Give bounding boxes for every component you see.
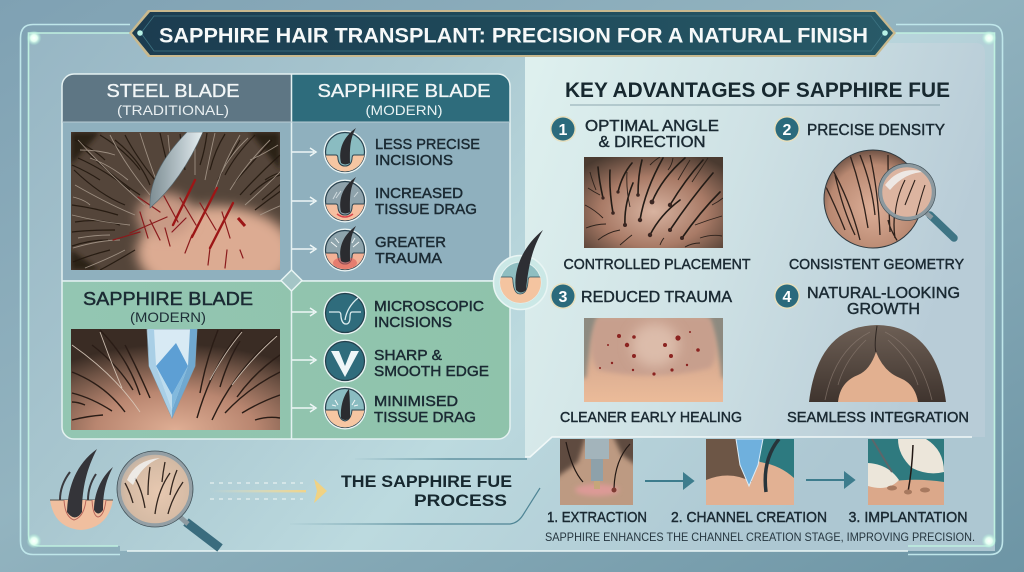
icon: sharp edge: [324, 340, 366, 382]
illustration: woman hair: [809, 325, 946, 402]
advantage 2: [774, 116, 964, 273]
sapphire header: (MODERN): [366, 102, 442, 118]
heading: & DIRECTION: [598, 134, 706, 151]
icon: magnifying glass: [117, 451, 220, 548]
arrow: [645, 474, 693, 488]
sapphire blade: [147, 329, 197, 418]
arrows and items: sapphire: [292, 292, 489, 430]
advantage 1: [550, 116, 750, 273]
badge 1: 1: [559, 122, 568, 139]
badge 4: 4: [783, 289, 792, 306]
icon: magnified density: [824, 150, 954, 248]
badge 3: 3: [559, 289, 568, 306]
heading: OPTIMAL ANGLE: [585, 118, 719, 135]
arrow: gold dotted: [210, 479, 327, 503]
heading: key advantages: KEY ADVANTAGES OF SAPPHIRE FUE: [565, 79, 950, 102]
arrow: [292, 308, 316, 316]
sapphire body: [62, 281, 510, 439]
arrow: [292, 404, 316, 412]
icon: microscopic incisions: [324, 292, 366, 334]
heading: process: [341, 472, 512, 510]
step 2: channel creation: 2. CHANNEL CREATION: [671, 509, 827, 526]
step 1: extraction: [548, 439, 646, 522]
title banner: [129, 10, 896, 57]
heading: REDUCED TRAUMA: [581, 289, 732, 306]
heading: PRECISE DENSITY: [807, 122, 945, 139]
sapphire header: SAPPHIRE BLADE: [318, 81, 490, 101]
diamond connector: [281, 270, 302, 291]
heading: process: PROCESS: [414, 491, 507, 510]
heading: [585, 118, 719, 151]
heading: process: THE SAPPHIRE FUE: [341, 472, 512, 491]
icon: follicle, tissue drag: [324, 177, 366, 222]
sapphire list text: [374, 298, 489, 426]
steel list text: LESS PRECISE: [375, 136, 480, 153]
sapphire header: [292, 74, 510, 122]
accent lines: [290, 459, 540, 524]
steel header: (TRADITIONAL): [117, 102, 229, 118]
steel list text: INCREASED: [375, 185, 463, 202]
steel body: [62, 122, 510, 280]
steel list text: TRAUMA: [375, 250, 442, 267]
steel header: STEEL BLADE: [106, 81, 240, 101]
icon: centre hair follicle: [494, 230, 548, 310]
steel list text: INCISIONS: [375, 152, 453, 169]
badge 4: [774, 283, 800, 309]
sapphire list text: MINIMISED: [374, 393, 458, 410]
caption: CLEANER EARLY HEALING: [560, 409, 742, 426]
photo: healing hairline: [584, 318, 723, 402]
steel header: [62, 74, 291, 122]
icon: follicle, less precise: [324, 128, 366, 174]
sapphire list text: SMOOTH EDGE: [374, 363, 489, 380]
step 1: extraction: 1. EXTRACTION: [547, 509, 647, 526]
heading: [807, 285, 960, 318]
icon: follicles: [50, 449, 113, 530]
panel: key advantages background: [525, 43, 985, 457]
icon: minimised drag: [324, 386, 366, 430]
title text: SAPPHIRE HAIR TRANSPLANT: PRECISION FOR A NATURAL FINISH: [159, 24, 868, 48]
arrow: [292, 356, 316, 364]
advantage 4: [774, 283, 969, 426]
step 3: implantation: [848, 439, 968, 526]
sapphire lower heading: [83, 289, 253, 325]
badge 2: 2: [783, 122, 792, 139]
arrow: [292, 148, 316, 156]
sapphire list text: MICROSCOPIC: [374, 298, 484, 315]
icon: follicle, greater trauma: [324, 226, 366, 272]
heading: NATURAL-LOOKING: [807, 285, 960, 302]
step 3: implantation: 3. IMPLANTATION: [848, 509, 968, 526]
steel list text: TISSUE DRAG: [375, 201, 477, 218]
incisions: [113, 196, 243, 268]
caption: CONSISTENT GEOMETRY: [789, 256, 964, 273]
arrow: [806, 473, 854, 487]
arrow: [292, 245, 316, 253]
blade: [150, 132, 203, 208]
step 2: channel creation: [671, 439, 827, 526]
sapphire list text: SHARP &: [374, 347, 442, 364]
sapphire list text: TISSUE DRAG: [374, 409, 476, 426]
photo: sapphire blade scalp: [71, 329, 280, 430]
steel list text: [375, 136, 480, 267]
caption: SEAMLESS INTEGRATION: [787, 409, 969, 426]
heading: GROWTH: [847, 301, 920, 318]
process band divider: [525, 437, 972, 457]
photo: angled hairs: [584, 157, 723, 248]
sapphire list text: INCISIONS: [374, 314, 452, 331]
table borders: [62, 74, 510, 439]
badge 2: [774, 116, 800, 142]
arrows and items: steel: [292, 128, 480, 272]
steel list text: GREATER: [375, 234, 446, 251]
panel: sapphire FUE process: [50, 430, 975, 548]
advantage 3: [550, 283, 742, 426]
panel: comparison table: [62, 74, 510, 439]
badge 3: [550, 283, 576, 309]
caption: process note: SAPPHIRE ENHANCES THE CHANNEL CREATION STAGE, IMPROVING PRECISION.: [545, 530, 975, 544]
photo: steel blade incisions: [71, 132, 280, 270]
sapphire lower heading: SAPPHIRE BLADE: [83, 289, 253, 309]
badge 1: [550, 116, 576, 142]
arrow: [292, 197, 316, 205]
caption: CONTROLLED PLACEMENT: [564, 256, 750, 273]
sapphire lower heading: (MODERN): [130, 309, 206, 325]
magnifier handle: [930, 215, 954, 238]
